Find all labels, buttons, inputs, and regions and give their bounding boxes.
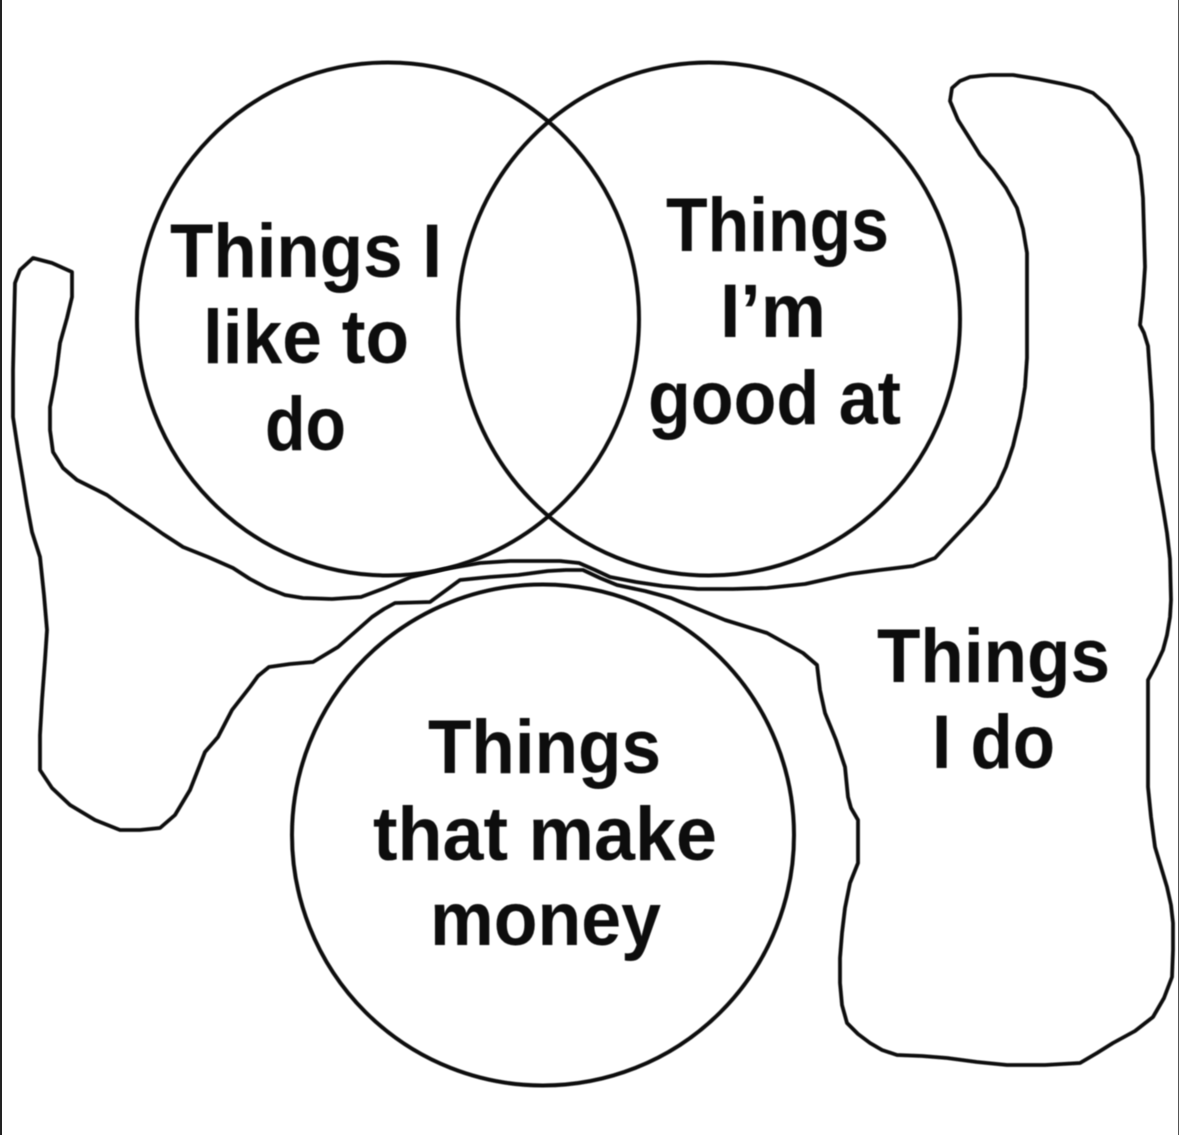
label: things that make money	[373, 705, 717, 962]
label: things I like to do: do	[265, 382, 346, 467]
label: things I'm good at: good at	[648, 356, 901, 441]
label: things that make money: that make	[373, 792, 717, 877]
label: things I like to do	[170, 209, 442, 467]
circle: things I like to do	[137, 62, 639, 576]
label: things I'm good at	[648, 183, 901, 441]
label: things I do	[877, 614, 1110, 785]
circle: things that make money	[292, 584, 794, 1086]
label: things I'm good at: I’m	[720, 269, 826, 354]
label: things I do: I do	[932, 700, 1055, 785]
label: things I do: Things	[877, 614, 1110, 699]
label: things I'm good at: Things	[666, 183, 889, 268]
label: things that make money: Things	[428, 705, 661, 790]
label: things that make money: money	[430, 877, 661, 962]
circle: things I'm good at	[458, 62, 960, 576]
label: things I like to do: like to	[203, 295, 409, 380]
label: things I like to do: Things I	[170, 209, 442, 294]
